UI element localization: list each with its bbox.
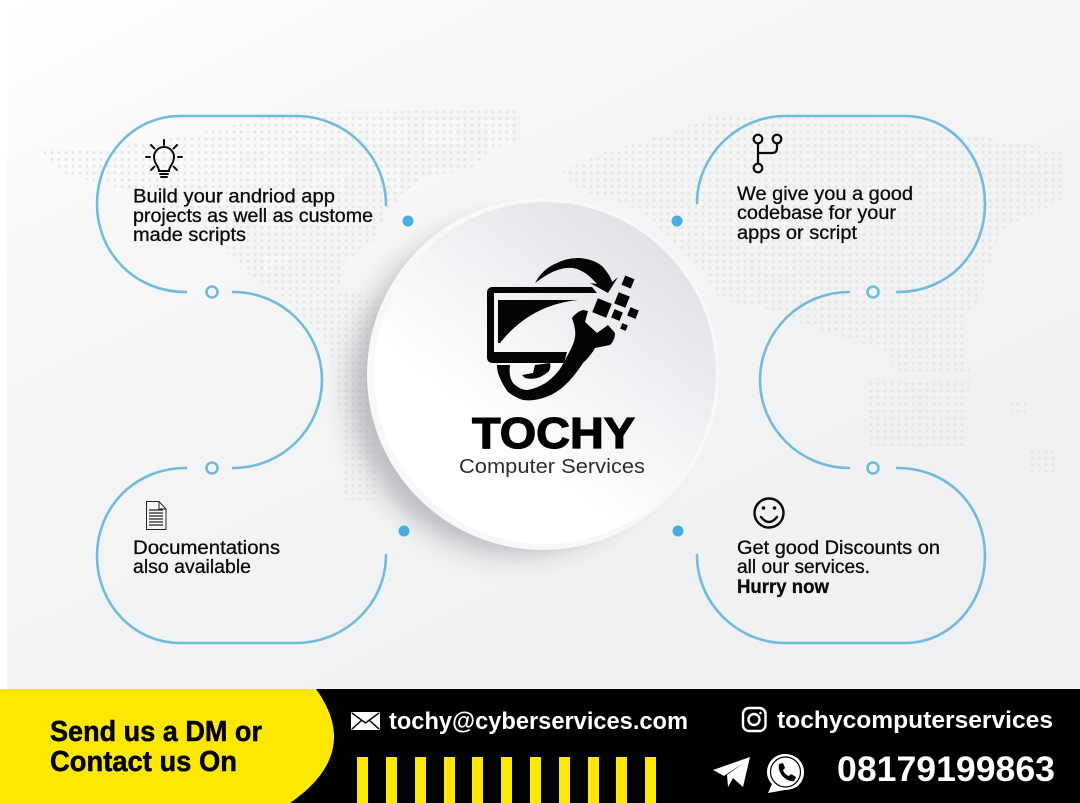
logo mark (487, 258, 639, 400)
text: build projects: made scripts (133, 225, 246, 246)
icon: smiley (754, 498, 784, 528)
text: build projects: Build your andriod app (133, 186, 335, 208)
text: discounts: Get good Discounts on (737, 538, 940, 559)
icon: instagram (743, 708, 766, 731)
connector: right middle curve (760, 292, 849, 468)
text: codebase: codebase for your (737, 203, 897, 224)
icon: document (146, 502, 166, 530)
text: discounts: all our services. (737, 557, 870, 578)
text: codebase: apps or script (737, 223, 858, 244)
text: discounts: Hurry now (737, 577, 829, 598)
text: codebase: We give you a good (737, 184, 913, 205)
connector nodes (206, 216, 878, 536)
icon: envelope (351, 712, 380, 730)
panel: top right connector outline (697, 116, 985, 292)
contact heading: Contact us On (50, 746, 237, 778)
text: documentation: Documentations (133, 538, 280, 559)
phone number: 08179199863 (837, 750, 1055, 789)
text: build projects: projects as well as custome (133, 206, 373, 227)
decorative yellow stripes (357, 757, 656, 803)
dotted world map (38, 110, 1062, 500)
logo wordmark: TOCHY (472, 409, 635, 458)
text: documentation: also available (133, 557, 251, 578)
central disc with logo (350, 198, 719, 554)
panel: bottom left connector outline (97, 468, 386, 643)
logo subtitle: Computer Services (459, 455, 645, 478)
footer bar (0, 689, 1080, 803)
icon: light bulb (146, 140, 182, 177)
panel: documentation (133, 502, 280, 578)
icon: telegram (713, 757, 750, 787)
icon: code branch (754, 135, 781, 172)
panel: codebase (737, 135, 913, 244)
panel: top left connector outline (97, 116, 386, 292)
icon: whatsapp (767, 754, 804, 793)
connector: left middle curve (233, 292, 322, 468)
panel: bottom right connector outline (697, 468, 985, 643)
panel: build projects (133, 140, 373, 246)
yellow contact panel (0, 689, 334, 803)
contact heading: Send us a DM or (50, 716, 262, 748)
instagram handle: tochycomputerservices (777, 707, 1053, 734)
email address: tochy@cyberservices.com (389, 708, 688, 735)
panel: discounts (737, 498, 940, 598)
